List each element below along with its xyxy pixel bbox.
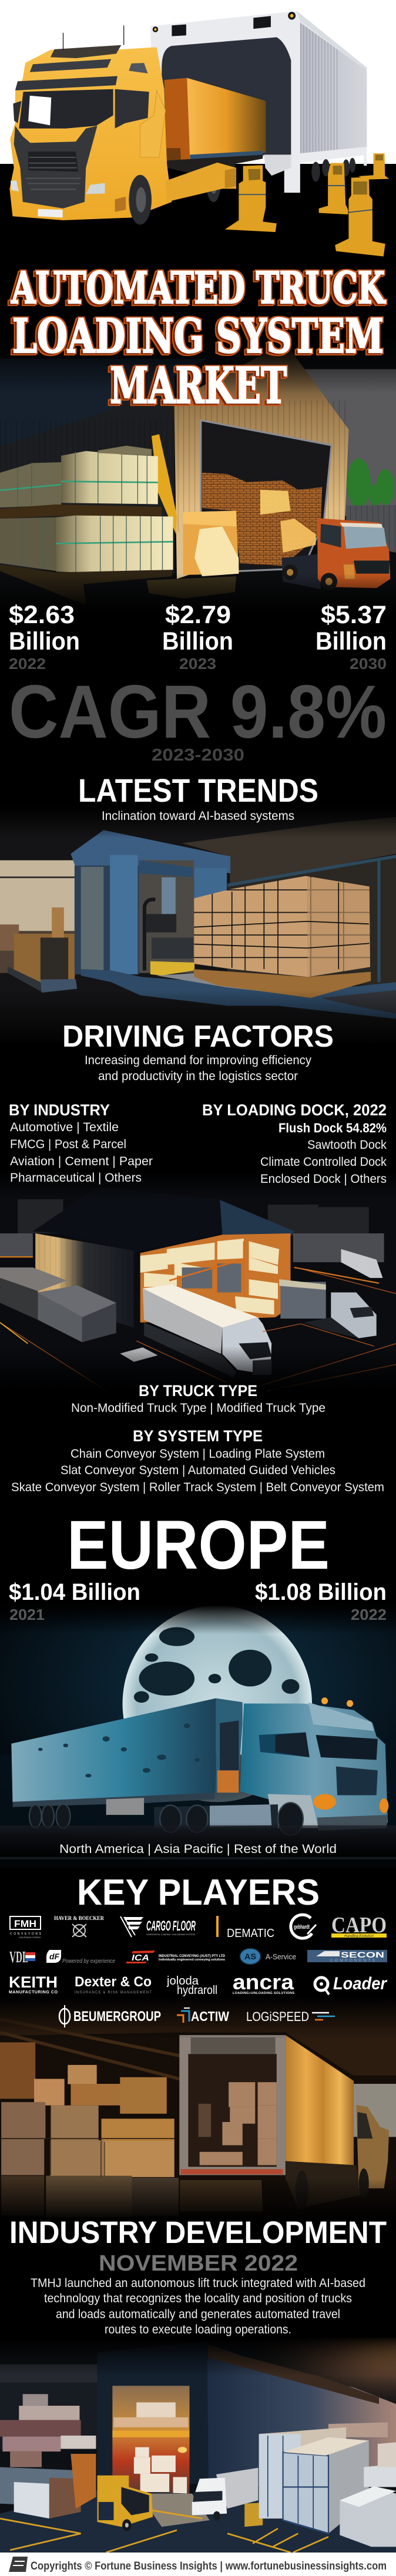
pallet upper wood	[0, 505, 162, 519]
panel: by truck type	[71, 1382, 325, 1415]
sky	[354, 2084, 396, 2137]
truck wheels	[129, 163, 236, 225]
logo: ICA	[126, 1951, 225, 1963]
panel: by industry: FMCG | Post & Parcel	[10, 1138, 126, 1151]
scene: truck under the moon	[0, 1605, 396, 1867]
logo: A-Service: AS	[244, 1952, 256, 1961]
panel: by system type: BY SYSTEM TYPE	[133, 1427, 263, 1445]
logo: Secon Components: COMPONENTS	[330, 1959, 375, 1963]
stat: 2022 market size: 2022	[9, 655, 46, 672]
logo: Keith Manufacturing: MANUFACTURING CO	[9, 1990, 58, 1995]
fence	[346, 505, 396, 553]
heading: latest trends: LATEST TRENDS	[78, 772, 318, 809]
left stacks	[0, 2394, 96, 2518]
stat: 2023 market size: $2.79	[165, 601, 231, 629]
logo: Ancra: ancra	[233, 1970, 294, 1994]
trees	[347, 458, 394, 508]
logo: Beumer Group: BEUMERGROUP	[73, 2009, 161, 2025]
icon: Fortune Business Insights logo	[9, 2557, 28, 2572]
back wall	[0, 860, 76, 931]
scene: warehouse with boxes and truck	[0, 1996, 396, 2241]
box side panel	[300, 22, 367, 153]
panel: by loading dock: Flush Dock 54.82%	[278, 1121, 387, 1135]
panel: by loading dock: Sawtooth Dock	[307, 1138, 387, 1152]
pallet lower wood	[0, 564, 172, 604]
logo: Cargo Floor: HORIZONTAL LOADING / UNLOADING SYSTEM	[146, 1933, 195, 1936]
stat: Europe 2022: $1.08 Billion	[255, 1579, 387, 1605]
moon	[123, 1605, 312, 1802]
panel: by industry	[9, 1101, 153, 1185]
road	[0, 1825, 396, 1859]
forklift arm	[152, 434, 177, 534]
shelf beams	[0, 2019, 179, 2079]
logo row 4	[59, 2005, 335, 2027]
yellow traffic bollards	[225, 153, 389, 257]
trailer side	[286, 2035, 354, 2165]
panel: by system type	[11, 1427, 384, 1494]
logo: Haver & Boecker	[54, 1915, 104, 1937]
floor lines	[0, 1267, 396, 1391]
panel: by industry: Aviation | Cement | Paper	[10, 1155, 153, 1168]
panel: by loading dock: BY LOADING DOCK, 2022	[202, 1101, 387, 1119]
stat: 2030 market size: $5.37	[321, 601, 387, 629]
scene: warehouse door, forklift and containers	[0, 2336, 396, 2554]
logo: Dematic: DEMATIC	[227, 1927, 274, 1940]
development description: TMHJ launched an autonomous lift truck integrated with AI-based	[31, 2276, 365, 2290]
stat: 2023 market size: Billion	[162, 627, 233, 655]
logo: Loader: Loader	[333, 1974, 388, 1993]
logo: Actiw	[177, 2008, 229, 2024]
pallet boxes upper	[61, 451, 158, 504]
logo: Dematic	[216, 1916, 274, 1940]
logo: Joloda Hydraroll	[166, 1975, 217, 1997]
stat: 2022 market size	[9, 601, 80, 672]
stat: Europe 2021	[9, 1579, 140, 1623]
stat: Europe 2022	[255, 1579, 387, 1623]
logo: Joloda Hydraroll: joloda	[166, 1975, 199, 1988]
logo: Dexter & Co: INSURANCE & RISK MANAGEMENT	[75, 1991, 152, 1995]
building gable wall	[220, 1200, 294, 1236]
stat: 2023 market size: 2023	[179, 655, 216, 672]
truck cab	[9, 45, 172, 220]
logo: Secon Components	[307, 1950, 387, 1963]
trend text: Inclination toward AI-based systems	[102, 809, 294, 823]
logo: Loader	[315, 1974, 388, 1995]
logo: Ancra: LOADING+UNLOADING SOLUTIONS	[233, 1992, 294, 1995]
right wooden building	[174, 343, 348, 579]
logo: CAPO: CAPO	[331, 1913, 387, 1938]
heading: driving factors: DRIVING FACTORS	[62, 1020, 334, 1054]
panel: by industry: Pharmaceutical | Others	[10, 1171, 142, 1185]
antennas	[63, 25, 124, 50]
logo: Gebhardt: gebhardt	[294, 1924, 310, 1931]
heading: key players: KEY PLAYERS	[77, 1872, 320, 1913]
hero illustration: yellow truck entering box	[9, 11, 389, 257]
scene: automated loader with pallet	[0, 806, 396, 1050]
second truck	[303, 1292, 377, 1339]
trailer	[11, 1699, 243, 1815]
panel: by industry: BY INDUSTRY	[9, 1101, 110, 1119]
logo: FMH Conveyors: FMH	[14, 1918, 36, 1929]
logo row 2	[9, 1948, 387, 1966]
stat: Europe 2021: $1.04 Billion	[9, 1579, 140, 1605]
development description: routes to execute loading operations.	[105, 2323, 291, 2336]
title	[11, 263, 386, 415]
panel: by loading dock: Climate Controlled Dock	[260, 1155, 387, 1169]
title: MARKET	[110, 357, 287, 415]
hero panel white band	[0, 0, 396, 164]
logo: FMH Conveyors: A BUHRMANN COMPANY	[19, 1936, 42, 1939]
logo: ICA: INDUSTRIAL CONVEYING (AUST) PTY LTD	[159, 1954, 225, 1958]
stat: 2030 market size: Billion	[316, 627, 387, 655]
door opening	[201, 421, 331, 571]
lumber stacks	[202, 473, 322, 566]
truck cab and wheels	[296, 2105, 389, 2210]
wooden cart	[8, 907, 78, 993]
logo: A-Service	[240, 1948, 296, 1965]
logo: Dexter & Co: Dexter & Co	[75, 1974, 152, 1990]
scene: isometric warehouse with white trucks	[0, 1171, 396, 1391]
logo: Actiw: ACTIW	[191, 2009, 229, 2024]
stat: 2023 market size	[162, 601, 233, 672]
stat: 2022 market size: Billion	[9, 627, 80, 655]
yellow forklift	[98, 2476, 153, 2531]
distant truck	[341, 1249, 382, 1278]
panel: by truck type: Non-Modified Truck Type | Modified Truck Type	[71, 1401, 325, 1415]
cab	[240, 1697, 388, 1828]
logo: Secon Components: SECON	[341, 1950, 384, 1959]
logo: FMH Conveyors	[10, 1916, 42, 1939]
stat: 2030 market size	[316, 601, 387, 672]
roof	[33, 1187, 222, 1252]
trailer chassis wheels	[264, 154, 355, 181]
logo: Logispeed: LOGiSPEED	[246, 2009, 309, 2024]
box interior	[162, 37, 291, 157]
orange trailer	[165, 78, 190, 163]
logo: Gebhardt	[291, 1915, 316, 1938]
logo: FMH Conveyors: CONVEYORS	[10, 1932, 42, 1936]
stat: 2022 market size: $2.63	[9, 601, 75, 629]
floor	[0, 2487, 396, 2553]
door interior	[112, 2386, 189, 2494]
logo row 3	[9, 1970, 388, 1997]
background racks	[18, 1199, 369, 1236]
driving factors text: Increasing demand for improving efficiency	[85, 1054, 311, 1067]
stat: 2030 market size: 2030	[350, 655, 387, 672]
logo: ICA: Individually engineered conveying solutions	[159, 1958, 225, 1962]
logo: DF powered by experience: dF	[49, 1952, 60, 1961]
logo: Beumer Group	[59, 2005, 161, 2027]
development description: and loads automatically and generates automated travel	[56, 2308, 340, 2321]
left cartons	[0, 2042, 179, 2217]
panel: by system type: Slat Conveyor System | Automated Guided Vehicles	[61, 1464, 335, 1477]
wrapped cartons	[194, 876, 370, 977]
truck underside and wheels	[29, 1802, 388, 1835]
logo: Keith Manufacturing: KEITH	[9, 1973, 58, 1991]
racks near the top edge	[0, 1233, 384, 1262]
panel: by industry: Automotive | Textile	[10, 1121, 119, 1134]
white van	[192, 2468, 258, 2521]
logo: A-Service: A-Service	[266, 1952, 296, 1961]
bright interior with racks	[140, 1233, 290, 1323]
development description	[31, 2276, 365, 2336]
orange truck	[281, 518, 390, 590]
logo: Cargo Floor	[120, 1916, 196, 1937]
scene: warehouse with pallets and orange truck	[0, 332, 396, 613]
driving factors text	[85, 1054, 311, 1083]
logo: CAPO: Handling Evolution	[344, 1935, 374, 1938]
logo: Joloda Hydraroll: hydraroll	[177, 1984, 217, 1997]
driving factors text: and productivity in the logistics sector	[98, 1070, 298, 1083]
logo row 1	[10, 1913, 387, 1940]
footer bar	[0, 2553, 396, 2576]
small table	[120, 1347, 158, 1362]
yellow cart	[244, 2503, 263, 2527]
building wall	[207, 2358, 396, 2487]
left building	[0, 361, 174, 574]
other regions: North America | Asia Pacific | Rest of the World	[59, 1842, 337, 1856]
side trailers left	[0, 1267, 67, 1291]
forklift mast	[145, 899, 194, 976]
logo: VDL: VDL	[9, 1948, 28, 1966]
panel: by loading dock: Enclosed Dock | Others	[260, 1172, 387, 1186]
logo: ICA: ICA	[132, 1953, 149, 1963]
door frame	[98, 2341, 209, 2484]
stat: Europe 2022: 2022	[351, 1606, 387, 1623]
white trailer	[143, 1284, 271, 1378]
conveyor	[81, 969, 396, 1019]
white containers	[259, 2422, 396, 2547]
right fence	[227, 856, 396, 982]
blue machine frame	[71, 830, 230, 974]
development description: technology that recognizes the locality and position of trucks	[44, 2292, 352, 2305]
panel: by truck type: BY TRUCK TYPE	[139, 1382, 257, 1400]
heading: Europe: EUROPE	[67, 1506, 330, 1584]
amber lights	[313, 1697, 388, 1813]
CAGR figure: 2023-2030	[152, 746, 244, 765]
pallet boxes lower	[56, 516, 173, 574]
logo: Haver & Boecker: HAVER & BOECKER	[54, 1915, 104, 1921]
logo row 1: CARGO FLOOR	[146, 1918, 196, 1934]
pallet wood	[193, 969, 371, 998]
box frame	[150, 11, 300, 193]
panel: by loading dock	[202, 1101, 387, 1186]
sensor pads and lamps	[153, 12, 296, 36]
development date: NOVEMBER 2022	[99, 2251, 298, 2276]
stat: Europe 2021: 2021	[9, 1606, 45, 1623]
logo: DF powered by experience: Powered by experience	[62, 1958, 115, 1965]
logo: DF powered by experience	[46, 1950, 115, 1965]
truck rear opening	[179, 2035, 286, 2212]
panel: by system type: Chain Conveyor System | Loading Plate System	[71, 1447, 325, 1461]
panel: by system type: Skate Conveyor System | Roller Track System | Belt Conveyor System	[11, 1481, 384, 1494]
